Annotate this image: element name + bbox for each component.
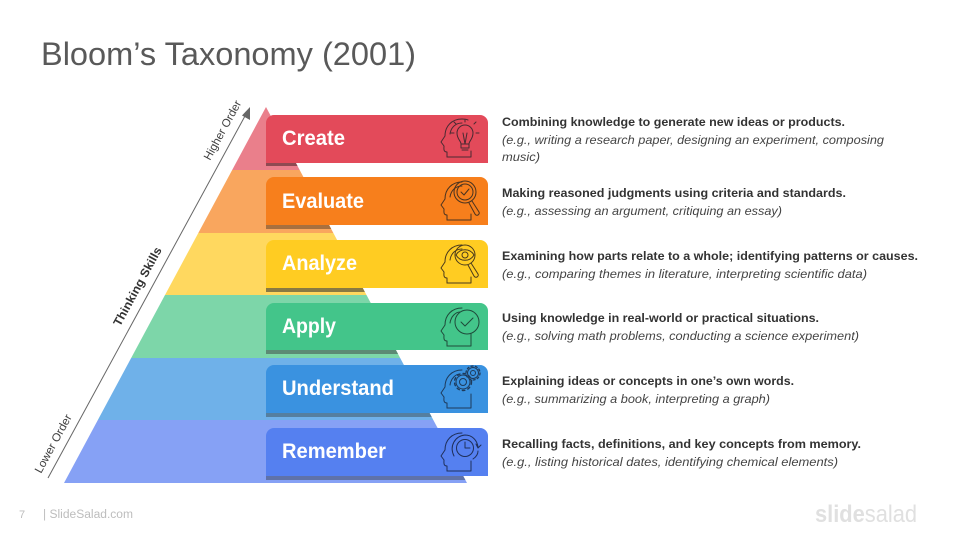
panel: create	[266, 115, 884, 164]
axis arrow: thinking skills	[48, 107, 250, 478]
panel: evaluate	[266, 177, 846, 225]
label: analyze: Analyze	[282, 252, 357, 275]
description: create: music)	[502, 150, 540, 164]
description: apply	[502, 311, 859, 343]
description: apply: (e.g., solving math problems, conducting a science experiment)	[502, 329, 859, 343]
icon: head with gears	[441, 366, 480, 408]
label: understand: Understand	[282, 377, 394, 400]
description: evaluate	[502, 186, 846, 218]
label: remember: Remember	[282, 440, 386, 463]
description: understand	[502, 374, 794, 406]
bar: apply	[266, 303, 488, 350]
panel: analyze	[266, 240, 918, 288]
label: higher order: Higher Order	[202, 99, 244, 162]
footer: page number: 7	[19, 509, 25, 521]
description: remember	[502, 437, 861, 469]
panel: understand	[266, 365, 794, 413]
description: create: (e.g., writing a research paper, designing an experiment, composing	[502, 133, 884, 147]
label: create: Create	[282, 127, 345, 150]
label: apply: Apply	[282, 315, 336, 338]
bar: understand	[266, 365, 488, 413]
bar: create	[266, 115, 488, 163]
description: create	[502, 115, 884, 164]
icon: head with magnifier	[441, 181, 479, 220]
panel: remember	[266, 428, 861, 476]
icon: head with check mark	[441, 308, 479, 346]
description: remember: (e.g., listing historical dates, identifying chemical elements)	[502, 455, 838, 469]
description: evaluate: Making reasoned judgments using criteria and standards.	[502, 186, 846, 200]
description: evaluate: (e.g., assessing an argument, critiquing an essay)	[502, 204, 782, 218]
description: apply: Using knowledge in real-world or practical situations.	[502, 311, 819, 325]
description: analyze: (e.g., comparing themes in literature, interpreting scientific data)	[502, 267, 867, 281]
bar: evaluate	[266, 177, 488, 225]
icon: head with eye	[441, 245, 478, 283]
logo: slidesalad: slidesalad	[815, 501, 917, 528]
description: remember: Recalling facts, definitions, and key concepts from memory.	[502, 437, 861, 451]
description: understand: Explaining ideas or concepts in one’s own words.	[502, 374, 794, 388]
label: thinking skills: Thinking Skills	[110, 244, 165, 328]
label: lower order: Lower Order	[33, 412, 75, 475]
panel: apply	[266, 303, 859, 350]
icon: head with light bulb	[441, 119, 479, 157]
title: Bloom’s Taxonomy (2001)	[41, 36, 416, 72]
bar: analyze	[266, 240, 488, 288]
icon: head with clock	[441, 433, 481, 471]
description: analyze	[502, 249, 918, 281]
description: create: Combining knowledge to generate new ideas or products.	[502, 115, 845, 129]
footer: site name: | SlideSalad.com	[43, 509, 133, 521]
description: analyze: Examining how parts relate to a whole; identifying patterns or causes.	[502, 249, 918, 263]
label: evaluate: Evaluate	[282, 190, 364, 213]
pyramid	[60, 107, 488, 483]
bar: remember	[266, 428, 488, 476]
description: understand: (e.g., summarizing a book, interpreting a graph)	[502, 392, 770, 406]
